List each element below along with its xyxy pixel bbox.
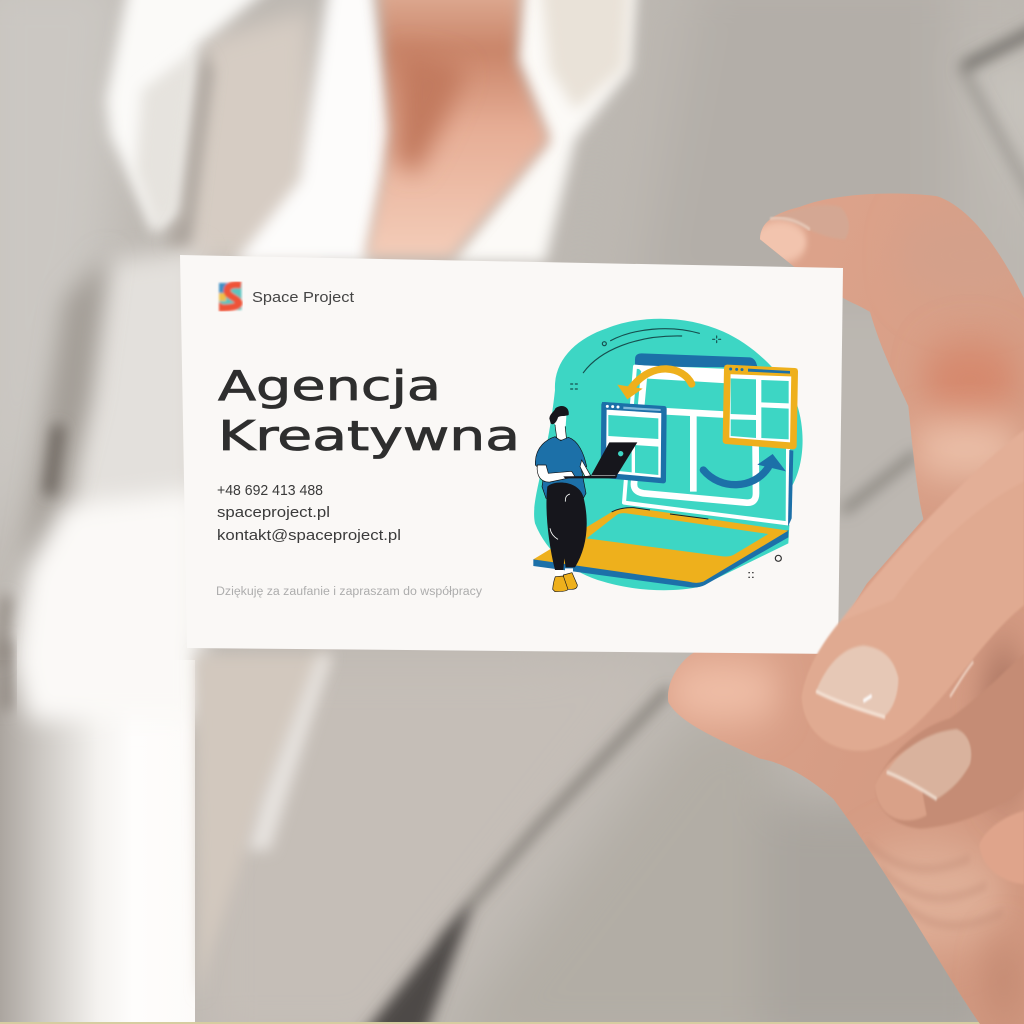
contact details: +48 692 413 488 — [217, 482, 323, 499]
hand — [663, 194, 1024, 1024]
third finger — [979, 811, 1024, 884]
collar — [106, 0, 290, 232]
laptop base — [533, 508, 788, 588]
brand name: Space Project — [252, 289, 355, 306]
illustration — [533, 319, 803, 592]
yellow window — [725, 365, 797, 446]
decorative lines — [571, 329, 721, 389]
heading — [218, 362, 520, 460]
contact details: kontakt@spaceproject.pl — [217, 527, 401, 544]
logo mark — [219, 283, 242, 310]
contact details: spaceproject.pl — [217, 504, 330, 521]
nail — [816, 646, 898, 716]
teal blob — [534, 319, 803, 590]
neck skin — [366, 0, 549, 257]
blue arrow — [703, 454, 786, 485]
blue window — [602, 402, 666, 481]
yellow arrow — [617, 369, 692, 399]
business card — [180, 255, 843, 654]
thank-you line: Dziękuję za zaufanie i zapraszam do współpracy — [216, 586, 482, 598]
heading: Kreatywna — [218, 412, 520, 460]
monitor — [624, 353, 793, 527]
finger overlapping the card corner — [802, 430, 1024, 884]
second finger — [875, 654, 1024, 829]
small marks — [748, 555, 781, 577]
heading: Agencja — [218, 362, 441, 410]
contact details — [217, 482, 401, 544]
person with laptop — [535, 406, 637, 592]
thumb nail — [770, 205, 849, 239]
shirt — [0, 0, 636, 1024]
